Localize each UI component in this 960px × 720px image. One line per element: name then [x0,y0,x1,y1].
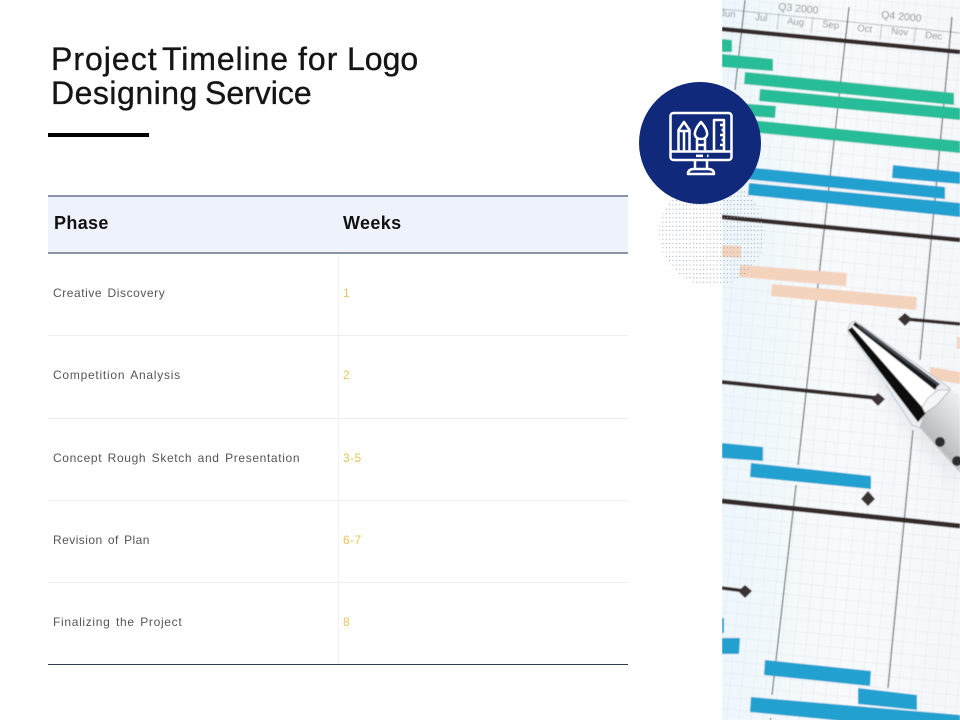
title: Logo [347,41,418,77]
title: Designing [51,75,198,111]
title: Timeline [162,41,289,77]
title [51,41,418,111]
row: Concept Rough Sketch and Presentation: Concept Rough Sketch and Presentation [53,451,300,465]
gantt peach bars [722,245,960,384]
gantt black lines [722,29,960,591]
icon: monitor [670,113,732,174]
row: Competition Analysis [48,336,628,419]
table header [48,195,628,254]
gantt header months: Oct [857,23,873,35]
row: Competition Analysis: Competition Analysis [53,368,181,382]
gantt milestones [738,313,912,598]
gantt header months: Dec [925,30,943,43]
title underline [48,133,149,137]
row: Revision of Plan: Revision of Plan [53,533,150,547]
row: Concept Rough Sketch and Presentation: 3-5 [343,451,362,465]
pen lower black stripe [848,327,926,422]
row: Concept Rough Sketch and Presentation [48,419,628,501]
row: Creative Discovery: 1 [343,286,350,300]
row: Creative Discovery [48,254,628,336]
table header: Phase [54,213,109,233]
row: Finalizing the Project: Finalizing the Project [53,615,182,629]
dotted halo decoration [659,191,765,283]
icon: pencil [678,122,690,151]
pen body [912,388,960,473]
gantt blue bars [722,165,960,720]
icon: brush [695,122,707,151]
gantt vertical lines [735,0,952,720]
icon badge: monitor with design tools [639,82,761,204]
gantt header months: Aug [787,16,805,29]
row: Creative Discovery: Creative Discovery [53,286,165,300]
gantt header months: Q3 2000 [778,1,819,17]
badge circle [639,82,761,204]
row: Finalizing the Project: 8 [343,615,350,629]
gantt header months: Q4 2000 [881,9,922,25]
pen upper black stripe [853,322,938,390]
pen [848,321,960,490]
gantt green bars [722,39,960,153]
pen cone white face [852,325,935,407]
title: for [298,41,338,77]
gantt header months: Sep [822,19,840,32]
row: Competition Analysis: 2 [343,368,350,382]
pen cone outer [848,321,950,428]
row: Finalizing the Project [48,583,628,665]
title: Project [51,41,158,77]
row: Revision of Plan: 6-7 [343,533,362,547]
row: Revision of Plan [48,501,628,583]
gantt header months: Jul [755,12,768,24]
photo: gantt chart with pen [722,0,960,720]
gantt header months: Nov [891,26,909,39]
gantt header months [720,1,960,47]
table header: Weeks [343,213,401,233]
table: project phases [48,195,628,665]
icon: ruler [714,120,724,151]
title: Service [205,75,312,111]
pen collar [922,390,950,413]
